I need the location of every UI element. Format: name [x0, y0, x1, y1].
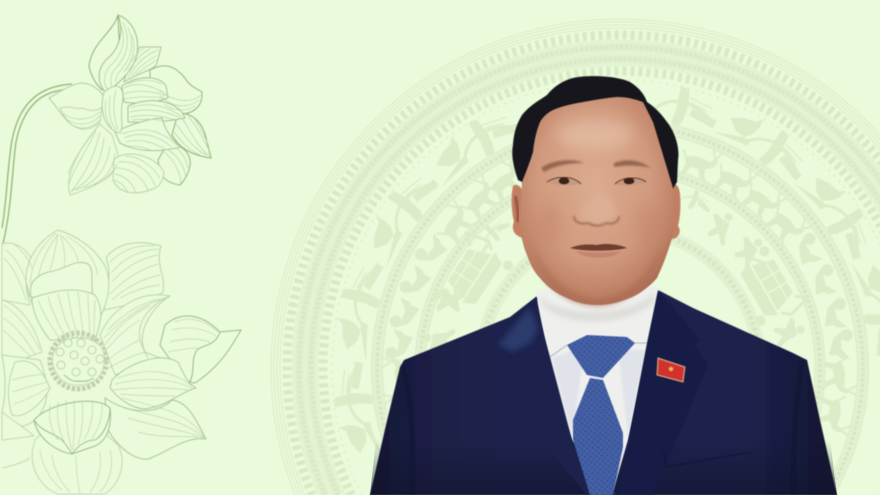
- breast pocket: [663, 452, 752, 467]
- right eyebrow: [614, 160, 651, 168]
- left eye: [547, 177, 581, 185]
- outer tooth ring: [287, 35, 880, 495]
- jaw shading: [530, 240, 665, 306]
- right ear: [666, 184, 680, 240]
- left eyebrow: [541, 160, 584, 172]
- bottom lotus veins: [3, 233, 218, 494]
- chain band one: [377, 125, 863, 495]
- left ear: [512, 185, 527, 240]
- forehead highlight: [557, 119, 633, 151]
- bronze drum pattern: [271, 19, 880, 495]
- top lotus flower: [49, 15, 211, 195]
- lotus stem: [2, 84, 72, 244]
- face: [520, 97, 674, 305]
- drum duck motifs: [333, 89, 880, 457]
- tie: [567, 335, 635, 495]
- sleeve creases: [403, 362, 802, 495]
- bottom lotus petals: [2, 230, 241, 494]
- chin shadow on collar: [540, 292, 655, 322]
- left lapel: [488, 297, 618, 495]
- flag lapel pin: [657, 358, 685, 382]
- chain band two: [420, 168, 820, 495]
- drum deer motifs: [381, 139, 859, 436]
- chain band three: [480, 228, 760, 495]
- left cheek flush: [534, 203, 562, 247]
- drum heron motifs: [326, 73, 880, 462]
- lotus seed pod: [50, 333, 106, 389]
- suit jacket: [370, 290, 837, 495]
- patterned bands: [293, 41, 880, 495]
- right cheek flush: [634, 203, 662, 247]
- shirt collar and front: [535, 286, 660, 495]
- drum boat and figure motifs: [421, 179, 811, 357]
- mouth: [570, 244, 627, 258]
- outer ring lines: [271, 19, 880, 495]
- top lotus petals: [49, 15, 211, 195]
- nose: [574, 190, 619, 226]
- dotted ring: [332, 80, 880, 495]
- top lotus veins: [64, 20, 209, 193]
- bottom lotus flower: [2, 230, 241, 494]
- inner tooth ring: [323, 71, 880, 495]
- drum small bird motifs: [385, 231, 855, 361]
- right lapel: [617, 290, 708, 495]
- right eye: [615, 178, 646, 186]
- portrait of man: [370, 76, 837, 495]
- hair: [512, 76, 678, 190]
- collar flaps: [550, 343, 647, 357]
- suit hem shadow: [370, 440, 837, 495]
